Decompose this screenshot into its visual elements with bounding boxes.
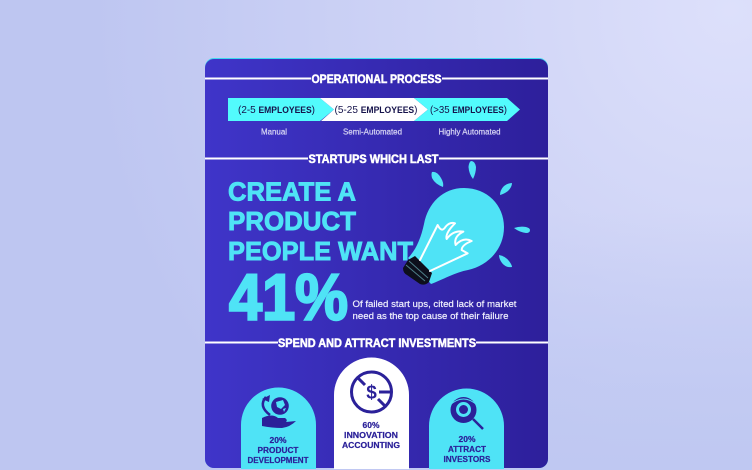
panel [205,58,548,468]
label: manual: Manual [261,126,287,136]
label: highly automated: Highly Automated [438,126,501,136]
text: 20% product development: DEVELOPMENT [248,456,309,465]
heading: spend and attract investments: SPEND AND ATTRACT INVESTMENTS [278,338,476,350]
icon: hand with globe [262,395,296,428]
headline: PRODUCT [228,206,356,236]
text: 20% product development [248,436,309,465]
section: startups which last [205,154,548,334]
text: 60% innovation accounting [342,421,400,450]
heading: operational process: OPERATIONAL PROCESS [312,74,442,86]
stat: 41 percent: 41% [229,260,348,334]
heading: startups which last: STARTUPS WHICH LAST [308,154,438,166]
headline: PEOPLE WANT [228,236,413,266]
arrow: over 35 employees [414,98,520,121]
text: 20% attract investors: ATTRACT [448,445,486,454]
arrow: over 35 employees: (>35 EMPLOYEES) [430,104,507,116]
arrow: 2-5 employees [228,98,334,121]
icon: dollar with no sign: $ [366,382,377,404]
stat description: need as the top cause of their failure [352,311,508,322]
arrow: 5-25 employees: (5-25 EMPLOYEES) [334,104,418,116]
card: innovation accounting [334,358,409,469]
arrow: 2-5 employees: (2-5 EMPLOYEES) [238,104,315,116]
card: product development [241,388,316,469]
stat description: Of failed start ups, cited lack of market [352,299,517,310]
headline: CREATE A [228,176,356,206]
icon: light rays [432,161,530,267]
text: 60% innovation accounting: ACCOUNTING [342,441,400,450]
text: 60% innovation accounting: INNOVATION [344,431,398,440]
text: 20% product development: 20% [270,436,286,445]
section: spend and attract investments [205,338,548,469]
text: 20% product development: PRODUCT [258,446,299,455]
icon: light bulb [403,161,530,285]
text: 20% attract investors [444,435,491,464]
text: 20% attract investors: 20% [458,435,476,444]
headline [228,176,413,266]
card: attract investors [429,389,504,469]
icon: magnifier with eye [450,397,483,429]
section: operational process [205,74,548,136]
arrow: 5-25 employees [320,98,428,121]
text: 60% innovation accounting: 60% [362,421,380,430]
text: 20% attract investors: INVESTORS [444,455,491,464]
label: semi-automated: Semi-Automated [343,126,402,136]
stat description [352,299,517,322]
